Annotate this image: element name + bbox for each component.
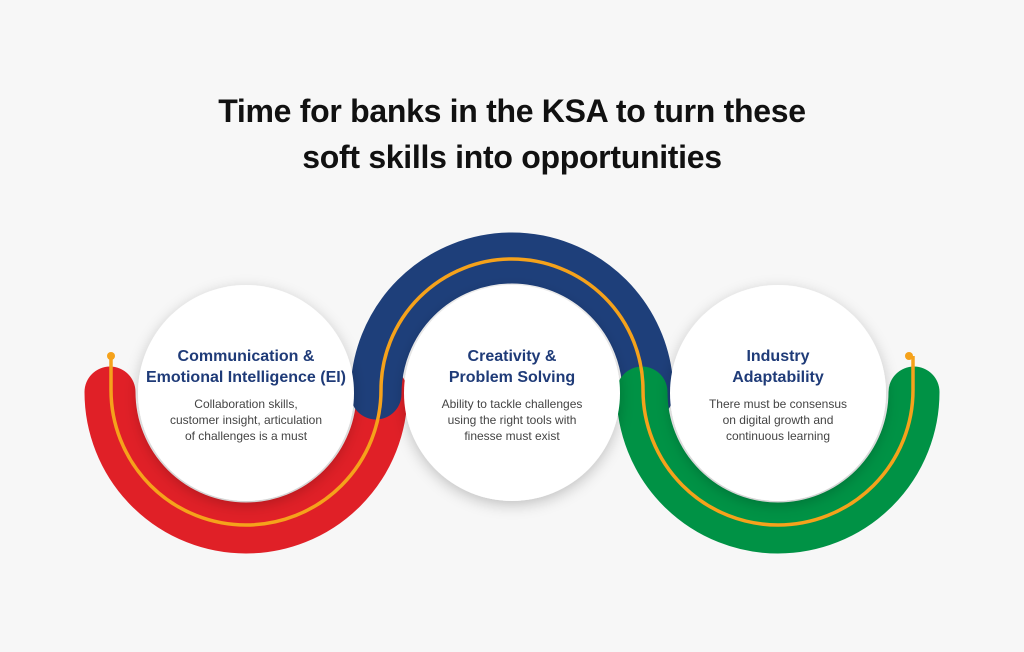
panel: creativity: Ability to tackle challenges	[442, 397, 582, 411]
title	[218, 93, 806, 175]
panel: communication: customer insight, articulation	[170, 413, 322, 427]
panel: adaptability: Adaptability	[732, 369, 824, 386]
panel: adaptability: There must be consensus	[709, 397, 847, 411]
panel: creativity: Creativity &	[468, 348, 556, 365]
arc: green	[642, 392, 914, 528]
panel: communication: Collaboration skills,	[194, 397, 298, 411]
panel: creativity: Problem Solving	[449, 369, 575, 386]
panel: communication: Communication &	[178, 348, 314, 365]
panel: creativity	[442, 348, 582, 443]
panel: adaptability: on digital growth and	[723, 413, 833, 427]
title: soft skills into opportunities	[302, 139, 722, 175]
panel: communication: Emotional Intelligence (EI)	[146, 369, 346, 386]
arc: blue	[376, 258, 648, 394]
panel: adaptability: Industry	[746, 348, 810, 365]
panel: communication: of challenges is a must	[185, 429, 307, 443]
panel: communication	[146, 348, 346, 443]
arc: red	[110, 392, 382, 528]
panel: adaptability	[709, 348, 847, 443]
panel: creativity: finesse must exist	[464, 429, 560, 443]
orange line	[107, 259, 913, 525]
title: Time for banks in the KSA to turn these	[218, 93, 806, 129]
white circles	[138, 285, 886, 501]
panel: creativity: using the right tools with	[448, 413, 576, 427]
panel: adaptability: continuous learning	[726, 429, 830, 443]
